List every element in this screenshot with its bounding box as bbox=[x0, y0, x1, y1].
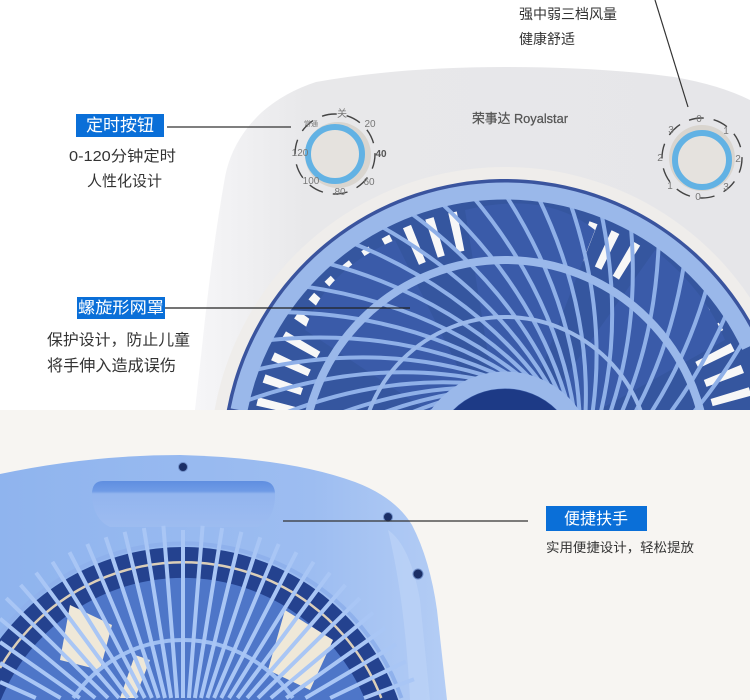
callout: spiral grille bbox=[47, 297, 410, 375]
callout: timer button bbox=[69, 114, 291, 190]
brand logo: 荣事达 Royalstar bbox=[472, 111, 569, 126]
spiral grille ribs bbox=[250, 200, 742, 410]
speed knob: 2 bbox=[657, 153, 663, 164]
screw holes bbox=[178, 462, 423, 579]
white gaps between blades bbox=[276, 227, 734, 410]
timer knob bbox=[292, 107, 387, 198]
grille recess bbox=[215, 167, 750, 410]
callout: timer button: 定时按钮 bbox=[86, 116, 154, 135]
callout: speed control: 强中弱三档风量 bbox=[519, 6, 617, 22]
hub bbox=[454, 389, 556, 410]
speed knob: 0 bbox=[696, 114, 702, 125]
panel: front of fan bbox=[195, 67, 750, 410]
rear grille interior bbox=[0, 547, 398, 700]
speed knob: 3 bbox=[668, 125, 674, 136]
rear outer ring bbox=[0, 543, 402, 698]
carry handle recess bbox=[92, 481, 275, 527]
speed knob: 2 bbox=[735, 154, 741, 165]
speed knob: 1 bbox=[723, 126, 729, 137]
callout: spiral grille: 将手伸入造成误伤 bbox=[47, 357, 176, 375]
callout: timer button: 0-120分钟定时 bbox=[69, 148, 176, 165]
timer knob: 120 bbox=[292, 148, 309, 159]
timer knob: 60 bbox=[363, 177, 375, 188]
beige rear ring bbox=[0, 562, 381, 698]
cream gaps bbox=[60, 605, 333, 698]
grille rings bbox=[230, 182, 750, 410]
speed knob bbox=[657, 114, 742, 203]
dark grille edge bbox=[227, 179, 750, 410]
rear blades bbox=[1, 578, 365, 700]
rear inner ring bbox=[73, 640, 293, 698]
blue rear housing bbox=[0, 455, 447, 700]
speed knob: 0 bbox=[695, 192, 701, 203]
callout: carry handle: 实用便捷设计，轻松提放 bbox=[546, 540, 694, 555]
side highlight bbox=[388, 530, 430, 700]
timer knob: 100 bbox=[303, 176, 320, 187]
fan interior bbox=[238, 190, 750, 410]
timer knob: 20 bbox=[364, 119, 376, 130]
callout: speed control bbox=[519, 0, 688, 107]
radial rear ribs bbox=[0, 526, 414, 698]
callout: carry handle: 便捷扶手 bbox=[564, 510, 628, 528]
panel: back of fan background bbox=[0, 410, 750, 700]
callout: carry handle bbox=[283, 506, 694, 555]
timer knob: 80 bbox=[334, 187, 346, 198]
timer knob: 常通 bbox=[304, 119, 318, 128]
callout: spiral grille: 螺旋形网罩 bbox=[78, 299, 164, 317]
back of fan bbox=[0, 455, 447, 700]
callout: timer button: 人性化设计 bbox=[87, 173, 162, 190]
fan body bbox=[195, 67, 750, 410]
timer knob: 关 bbox=[337, 107, 347, 120]
blade shading bbox=[306, 204, 724, 410]
callout: spiral grille: 保护设计，防止儿童 bbox=[47, 330, 190, 349]
speed knob: 1 bbox=[667, 181, 673, 192]
timer knob: 40 bbox=[375, 149, 387, 160]
speed knob: 3 bbox=[723, 182, 729, 193]
callout: speed control: 健康舒适 bbox=[519, 31, 575, 47]
